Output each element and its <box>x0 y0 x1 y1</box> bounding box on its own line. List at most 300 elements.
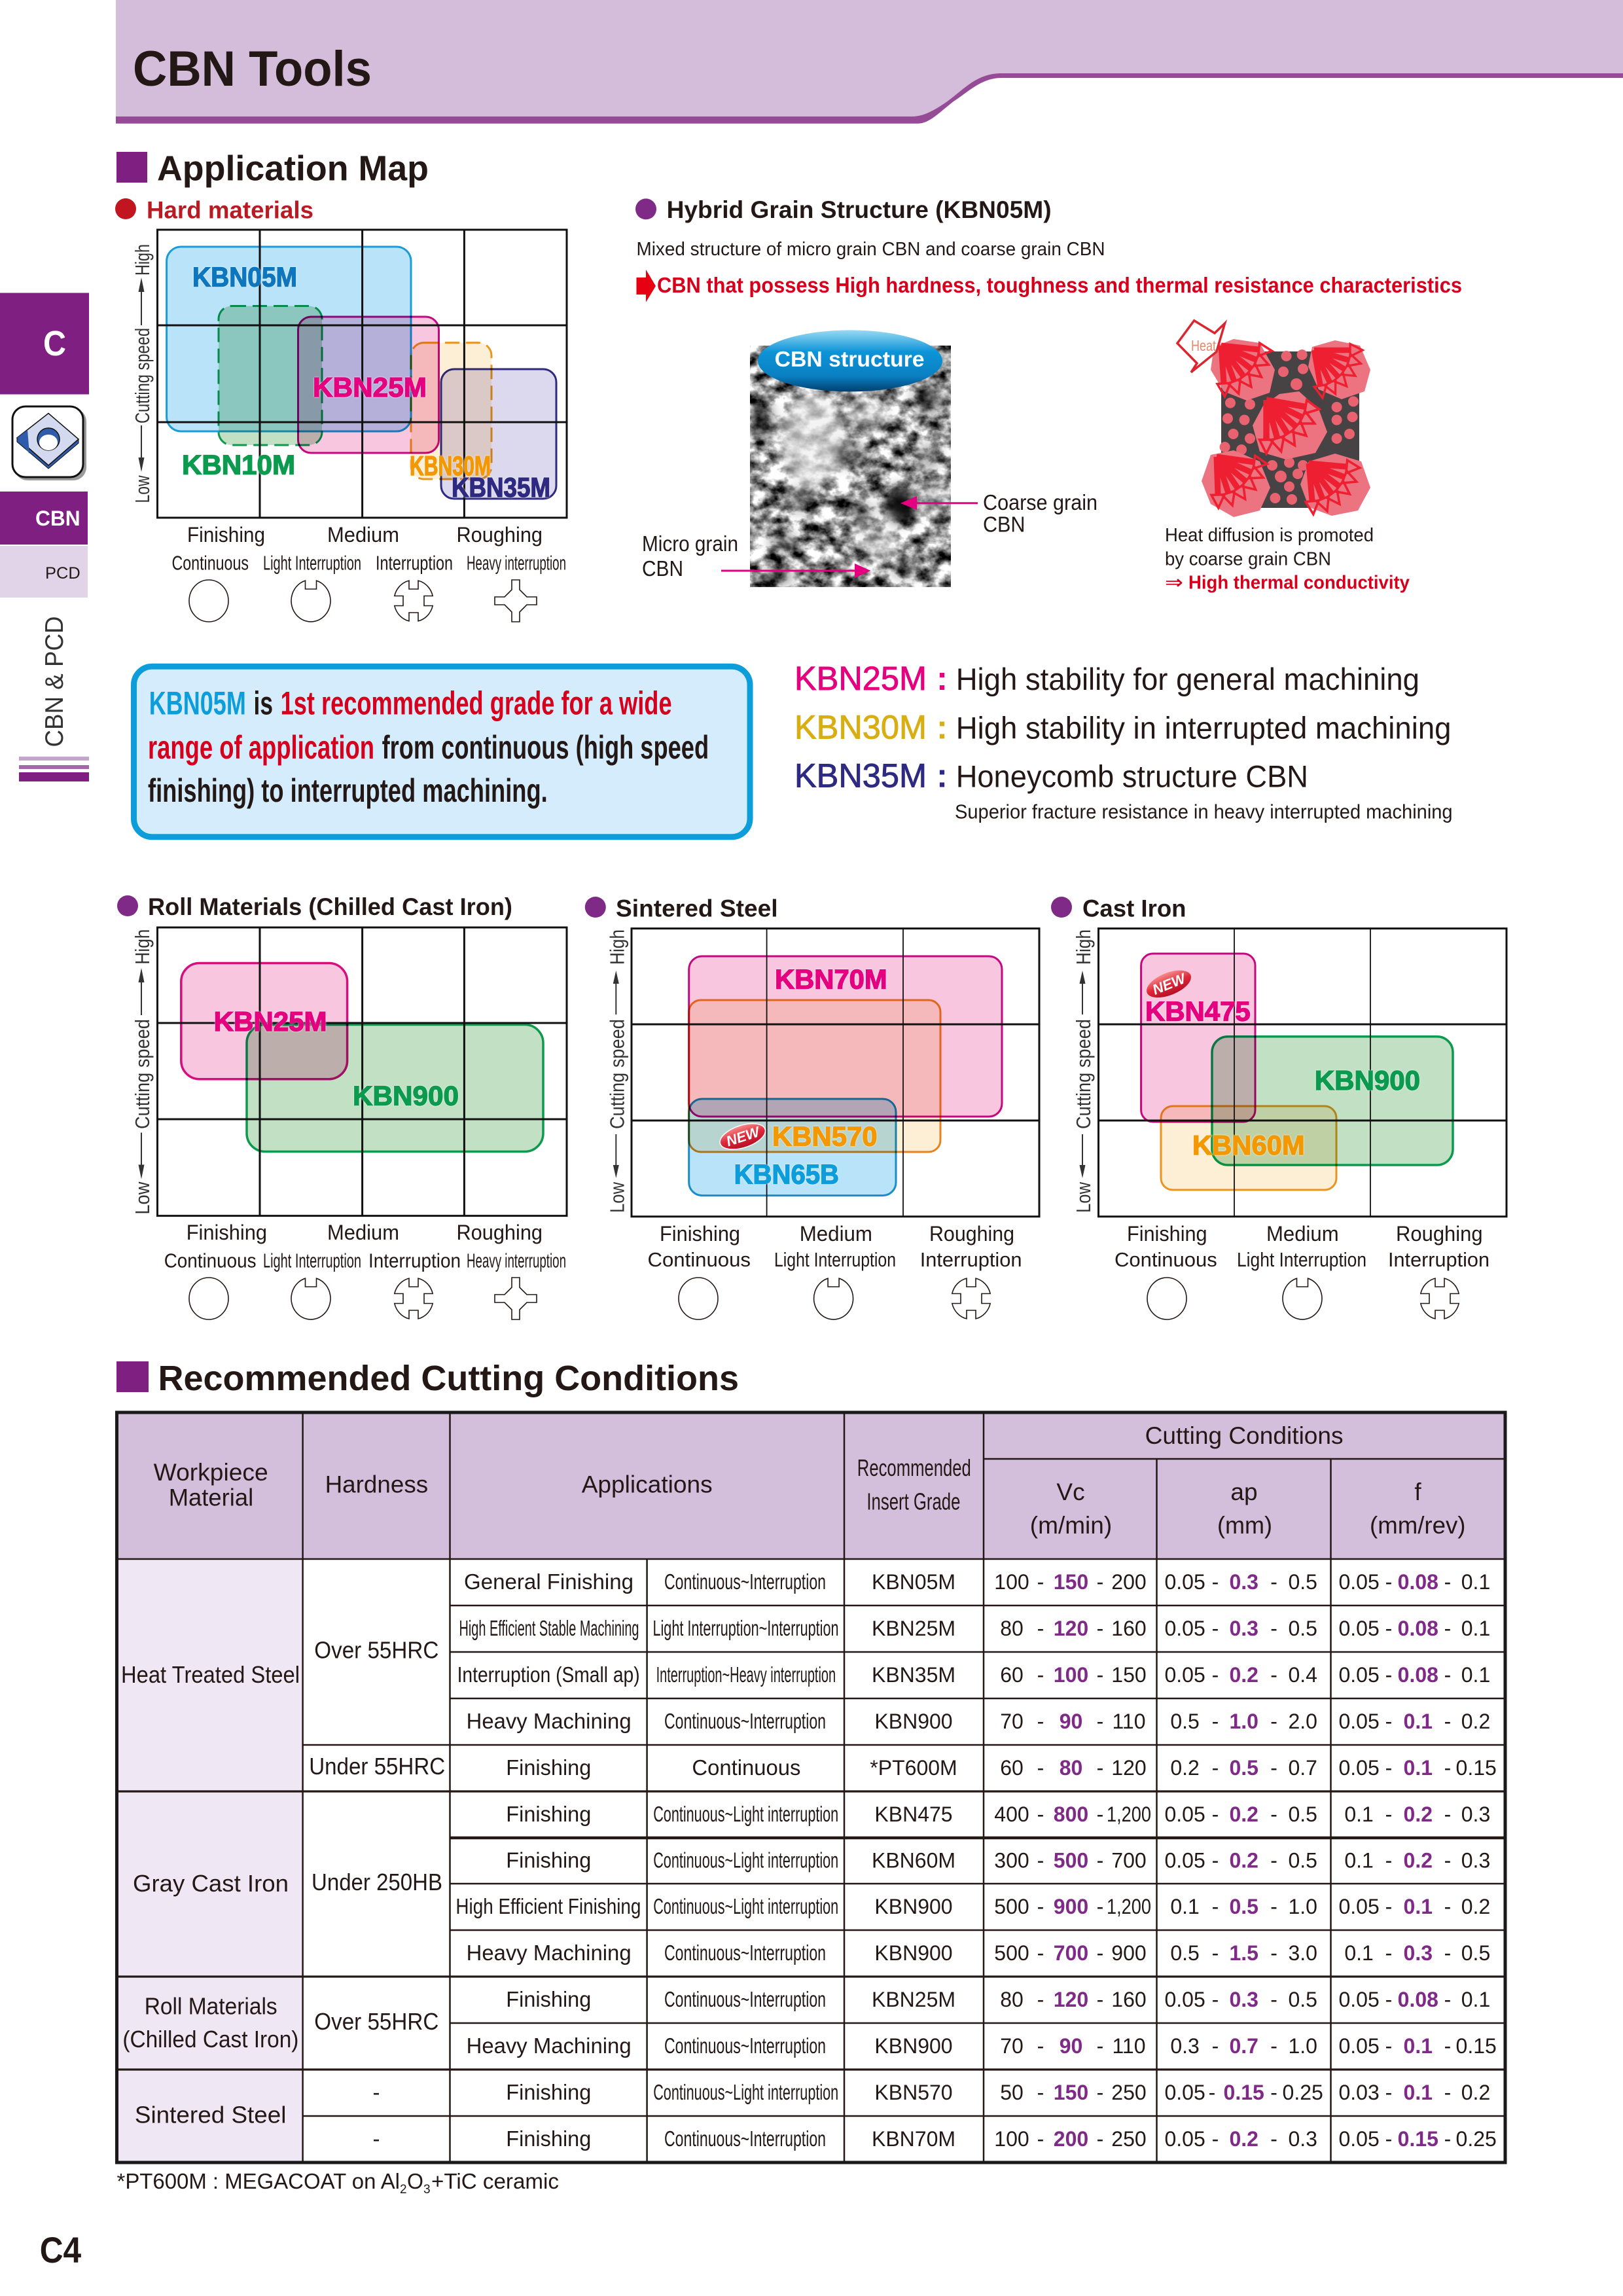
row: KBN35M: - <box>1444 1663 1451 1687</box>
row: KBN35M: - <box>1270 1663 1277 1687</box>
row: KBN900 gray iron heavy machining: Continuous~Interruption <box>664 1941 826 1965</box>
workpiece material and hardness cells <box>121 1637 445 2151</box>
grade legend <box>794 660 1453 823</box>
subheading: Sintered Steel: Sintered Steel <box>616 895 778 922</box>
table header: Insert Grade <box>866 1488 960 1515</box>
label KBN60M: KBN60M <box>1192 1130 1305 1160</box>
row: KBN25M: - <box>1212 1617 1219 1640</box>
region: KBN60M <box>1161 1106 1336 1190</box>
x axis labels: Light Interruption <box>774 1248 896 1271</box>
row: KBN570: 0.25 <box>1283 2081 1323 2104</box>
workpiece material and hardness cells: Gray Cast Iron <box>133 1870 289 1897</box>
legend: KBN25M: KBN25M <box>794 660 927 697</box>
y axis: High <box>131 244 154 276</box>
row: KBN570: 0.1 <box>1404 2081 1433 2104</box>
row: KBN60M: Continuous~Light interruption <box>653 1848 838 1872</box>
row: KBN60M: 0.1 <box>1344 1848 1374 1872</box>
y axis <box>606 929 629 1213</box>
heat caption: by coarse grain CBN <box>1165 549 1331 570</box>
table header: Workpiece <box>154 1459 268 1486</box>
row: PT600M: 80 <box>1060 1756 1082 1780</box>
row: KBN900 gray iron heavy machining <box>467 1941 1490 1965</box>
legend: KBN30M: KBN30M <box>794 709 927 746</box>
icon: heat arrow <box>1177 321 1225 372</box>
icon: CBN insert <box>12 406 86 480</box>
arrow: micro grain <box>721 564 871 578</box>
row: KBN25M roll materials: Finishing <box>506 1987 591 2011</box>
row: KBN35M: 100 <box>1054 1663 1088 1687</box>
workpiece material and hardness cells: Under 55HRC <box>309 1753 445 1780</box>
y axis: Cutting speed <box>1072 1019 1095 1129</box>
row: KBN25M roll materials: - <box>1385 1988 1392 2011</box>
row: KBN70M: 200 <box>1054 2127 1088 2151</box>
label KBN570: KBN570 <box>772 1121 878 1152</box>
heading: Application Map: Application Map <box>157 149 429 188</box>
row: KBN475 <box>506 1802 1490 1826</box>
row: KBN900 heavy machining: Heavy Machining <box>467 1709 632 1733</box>
row: KBN900 roll materials: 0.1 <box>1404 2034 1433 2058</box>
label KBN900: KBN900 <box>353 1081 459 1111</box>
row: KBN25M: - <box>1444 1617 1451 1640</box>
table header: Recommended <box>857 1454 971 1481</box>
row: KBN60M <box>506 1848 1490 1872</box>
row: KBN35M: Interruption (Small ap) <box>457 1662 640 1687</box>
label: micro grain CBN: Micro grain <box>642 531 738 556</box>
region: KBN25M <box>181 963 348 1079</box>
heat caption: High thermal conductivity <box>1188 573 1410 594</box>
row: KBN35M: 0.08 <box>1398 1663 1438 1687</box>
badge: NEW <box>1143 965 1195 1003</box>
callout: KBN05M recommendation: 1st recommended grade for a wide <box>281 685 672 722</box>
x axis labels <box>171 523 566 575</box>
label KBN65B: KBN65B <box>734 1159 839 1190</box>
table header <box>154 1422 1466 1539</box>
row: KBN900 gray iron heavy machining: - <box>1097 1941 1103 1965</box>
row: KBN900 heavy machining: Continuous~Interruption <box>664 1709 826 1733</box>
row: KBN900 heavy machining: 0.2 <box>1461 1710 1490 1733</box>
row: KBN70M: 0.05 <box>1338 2127 1380 2151</box>
row: KBN475: 400 <box>994 1803 1029 1826</box>
diagram: heat diffusion <box>1177 321 1370 519</box>
row: KBN25M: 80 <box>1000 1617 1024 1640</box>
region: KBN65B <box>689 1099 896 1196</box>
row: KBN900 roll materials: 1.0 <box>1288 2034 1317 2058</box>
workpiece material and hardness cells: Over 55HRC <box>314 2008 438 2035</box>
row: KBN25M: 120 <box>1054 1617 1088 1640</box>
x axis labels <box>164 1221 566 1272</box>
row: KBN900 heavy machining: KBN900 <box>874 1710 953 1733</box>
row: KBN900 high efficient finishing <box>455 1894 1490 1918</box>
row: KBN900 high efficient finishing: High Efficient Finishing <box>455 1894 641 1918</box>
row: KBN900 gray iron heavy machining: 0.3 <box>1404 1941 1433 1965</box>
row: KBN70M: Continuous~Interruption <box>664 2126 826 2151</box>
row: KBN25M roll materials: - <box>1037 1988 1044 2011</box>
workpiece icons <box>679 1278 990 1319</box>
label KBN900: KBN900 <box>1315 1065 1420 1096</box>
row: KBN35M: 0.2 <box>1229 1663 1258 1687</box>
row: KBN25M roll materials: - <box>1212 1988 1219 2011</box>
row: KBN05M: 0.5 <box>1288 1570 1317 1594</box>
row: KBN900 gray iron heavy machining: 0.5 <box>1461 1941 1490 1965</box>
page number: C4 <box>40 2229 81 2270</box>
row: KBN570: 0.05 <box>1164 2081 1205 2104</box>
row: KBN60M: 500 <box>1054 1848 1088 1872</box>
region: KBN475 <box>1141 954 1255 1122</box>
chart: Sintered Steel map <box>606 929 1039 1319</box>
panel: hybrid grain structure <box>635 196 1462 594</box>
row: KBN70M: 0.05 <box>1164 2127 1205 2151</box>
row: PT600M: 0.15 <box>1456 1756 1497 1780</box>
y axis <box>131 244 154 503</box>
row: KBN60M: 300 <box>994 1848 1029 1872</box>
heat caption: Heat diffusion is promoted <box>1165 525 1374 546</box>
row: KBN60M: - <box>1212 1848 1219 1872</box>
row: KBN70M: - <box>1444 2127 1451 2151</box>
row: KBN900 roll materials: 0.15 <box>1456 2034 1497 2058</box>
row: KBN900 gray iron heavy machining: 0.1 <box>1344 1941 1374 1965</box>
row: KBN25M <box>459 1616 1490 1640</box>
row: KBN900 heavy machining: 90 <box>1060 1710 1082 1733</box>
row: KBN570: - <box>1385 2081 1392 2104</box>
row: KBN900 high efficient finishing: 0.1 <box>1404 1895 1433 1918</box>
table header: f <box>1414 1479 1421 1505</box>
row: KBN900 high efficient finishing: 1,200 <box>1107 1895 1151 1918</box>
row: KBN475: KBN475 <box>874 1803 953 1826</box>
x axis labels: Heavy interruption <box>467 551 566 575</box>
row: KBN900 roll materials: - <box>1097 2034 1103 2058</box>
row: KBN25M: 160 <box>1111 1617 1147 1640</box>
callout: KBN05M recommendation: range of application <box>148 729 374 766</box>
chapter tab C: C <box>43 324 66 363</box>
row: KBN25M: Light Interruption~Interruption <box>653 1616 839 1640</box>
workpiece material and hardness cells: Roll Materials <box>145 1993 277 2020</box>
row: PT600M: - <box>1037 1756 1044 1780</box>
label KBN25M: KBN25M <box>214 1006 327 1037</box>
row: KBN35M: - <box>1097 1663 1103 1687</box>
row: PT600M: - <box>1212 1756 1219 1780</box>
table header: (mm/rev) <box>1370 1512 1466 1539</box>
row: KBN70M: 0.3 <box>1288 2127 1317 2151</box>
row: KBN900 high efficient finishing: 0.1 <box>1170 1895 1200 1918</box>
row: KBN25M: - <box>1037 1617 1044 1640</box>
callout: KBN05M recommendation: finishing) to interrupted machining. <box>148 772 548 809</box>
footnote: 2 <box>400 2183 407 2197</box>
x axis labels: Medium <box>800 1222 872 1246</box>
chart: Hard materials map <box>131 230 567 622</box>
table header: (m/min) <box>1030 1512 1112 1539</box>
row: KBN475: 800 <box>1054 1803 1088 1826</box>
y axis: Cutting speed <box>131 1019 154 1129</box>
row: KBN475: 1,200 <box>1107 1803 1151 1826</box>
y axis: High <box>131 929 154 965</box>
row: KBN570: 0.03 <box>1338 2081 1380 2104</box>
y axis <box>131 929 154 1215</box>
label KBN30M: KBN30M <box>410 450 491 481</box>
x axis labels: Medium <box>327 523 399 547</box>
row: KBN05M: - <box>1270 1570 1277 1594</box>
row: KBN05M: Continuous~Interruption <box>664 1570 826 1594</box>
row: KBN25M roll materials: 0.1 <box>1461 1988 1490 2011</box>
y axis: Cutting speed <box>606 1019 629 1129</box>
heat caption <box>1165 525 1410 594</box>
label KBN475: KBN475 <box>1145 996 1251 1027</box>
label: coarse grain CBN: Coarse grain <box>983 490 1097 514</box>
row: KBN570: 0.15 <box>1224 2081 1264 2104</box>
description: Mixed structure of micro grain CBN and coarse grain CBN <box>636 239 1105 260</box>
footnote: +TiC ceramic <box>431 2169 559 2193</box>
row: KBN25M roll materials: 0.5 <box>1288 1988 1317 2011</box>
x axis labels: Roughing <box>1396 1222 1483 1246</box>
badge: NEW: NEW <box>1150 969 1189 998</box>
x axis labels: Finishing <box>1127 1222 1207 1246</box>
legend note: Superior fracture resistance in heavy interrupted machining <box>955 800 1453 823</box>
workpiece material and hardness cells: Under 250HB <box>312 1869 442 1895</box>
x axis labels: Interruption <box>920 1248 1022 1271</box>
legend: KBN35M: KBN35M <box>794 757 927 795</box>
row: KBN60M: 0.05 <box>1164 1848 1205 1872</box>
row: KBN900 heavy machining: 1.0 <box>1229 1710 1258 1733</box>
row: KBN475: Continuous~Light interruption <box>653 1802 838 1826</box>
tab PCD: PCD <box>45 564 80 583</box>
row: KBN35M: 0.4 <box>1288 1663 1317 1687</box>
vertical chapter label: CBN & PCD <box>41 617 69 747</box>
table header: (mm) <box>1217 1512 1272 1539</box>
row: KBN900 roll materials: - <box>1385 2034 1392 2058</box>
row: PT600M: 0.5 <box>1229 1756 1258 1780</box>
row: KBN900 roll materials: 90 <box>1060 2034 1082 2058</box>
row: KBN05M: 200 <box>1111 1570 1147 1594</box>
row: KBN900 heavy machining: 110 <box>1112 1710 1146 1733</box>
row: KBN900 roll materials: KBN900 <box>874 2034 953 2058</box>
row: KBN475: 0.05 <box>1164 1803 1205 1826</box>
icon: red arrow <box>636 270 656 302</box>
row: KBN05M: - <box>1037 1570 1044 1594</box>
row: KBN25M: 0.08 <box>1398 1617 1438 1640</box>
y axis: Low <box>131 1181 154 1215</box>
row: KBN475: 0.5 <box>1288 1803 1317 1826</box>
x axis labels: Heavy interruption <box>467 1249 566 1272</box>
row: KBN570: 0.2 <box>1461 2081 1490 2104</box>
row: KBN900 gray iron heavy machining: Heavy Machining <box>467 1941 632 1965</box>
row: KBN70M <box>506 2126 1497 2151</box>
table header: Hardness <box>325 1471 428 1498</box>
row: KBN25M: 0.5 <box>1288 1617 1317 1640</box>
row: KBN900 gray iron heavy machining: 0.5 <box>1170 1941 1200 1965</box>
row: KBN35M: - <box>1037 1663 1044 1687</box>
row: KBN60M: 0.5 <box>1288 1848 1317 1872</box>
row: PT600M: - <box>1385 1756 1392 1780</box>
row: KBN35M: 0.1 <box>1461 1663 1490 1687</box>
row: KBN900 heavy machining: - <box>1270 1710 1277 1733</box>
row: KBN900 gray iron heavy machining: 3.0 <box>1288 1941 1317 1965</box>
row: KBN25M: - <box>1385 1617 1392 1640</box>
row: KBN900 high efficient finishing: - <box>1444 1895 1451 1918</box>
legend: KBN35M: Honeycomb structure CBN <box>956 759 1308 794</box>
row: KBN570: - <box>1037 2081 1044 2104</box>
row: KBN70M: Finishing <box>506 2126 591 2151</box>
row: KBN900 heavy machining: 0.05 <box>1338 1710 1380 1733</box>
sidebar <box>0 293 89 781</box>
row: KBN70M: - <box>1097 2127 1103 2151</box>
legend: KBN30M <box>794 709 1452 746</box>
row: KBN60M: 0.2 <box>1229 1848 1258 1872</box>
row: KBN900 roll materials: 0.3 <box>1170 2034 1200 2058</box>
row: KBN05M: - <box>1212 1570 1219 1594</box>
row: KBN35M: KBN35M <box>872 1663 955 1687</box>
row: PT600M: Continuous <box>692 1755 800 1780</box>
row: KBN35M: Interruption~Heavy interruption <box>656 1662 836 1687</box>
row: KBN475: 0.2 <box>1229 1803 1258 1826</box>
arrow: coarse grain <box>901 496 978 510</box>
table header: Applications <box>582 1471 713 1498</box>
tab PCD <box>0 546 88 598</box>
row: KBN900 heavy machining: 70 <box>1000 1710 1024 1733</box>
row: KBN900 high efficient finishing: - <box>1097 1895 1103 1918</box>
row: KBN60M: 700 <box>1111 1848 1147 1872</box>
row: KBN70M: - <box>1037 2127 1044 2151</box>
label: micro grain CBN: CBN <box>642 556 683 581</box>
y axis: Low <box>131 475 154 503</box>
row: KBN05M: 100 <box>994 1570 1029 1594</box>
row: KBN900 high efficient finishing: KBN900 <box>874 1895 953 1918</box>
row: KBN900 gray iron heavy machining: 700 <box>1054 1941 1088 1965</box>
row: KBN475: - <box>1212 1803 1219 1826</box>
row: KBN570: - <box>1444 2081 1451 2104</box>
label: micro grain CBN <box>642 531 738 581</box>
row: KBN570: Continuous~Light interruption <box>653 2080 838 2104</box>
row: KBN35M: - <box>1385 1663 1392 1687</box>
row: KBN900 heavy machining: 0.1 <box>1404 1710 1433 1733</box>
row: KBN05M: 150 <box>1054 1570 1088 1594</box>
x axis labels: Medium <box>327 1221 399 1244</box>
footnote <box>116 2169 559 2197</box>
label KBN10M: KBN10M <box>182 449 295 480</box>
label KBN25M: KBN25M <box>313 372 427 403</box>
row: KBN25M roll materials: 160 <box>1111 1988 1147 2011</box>
row: KBN05M: - <box>1385 1570 1392 1594</box>
row: PT600M: - <box>1444 1756 1451 1780</box>
row: KBN05M: 0.05 <box>1338 1570 1380 1594</box>
row: KBN900 gray iron heavy machining: 500 <box>994 1941 1029 1965</box>
x axis labels: Finishing <box>660 1222 740 1246</box>
row: KBN900 gray iron heavy machining: - <box>1037 1941 1044 1965</box>
row: KBN60M: - <box>1444 1848 1451 1872</box>
x axis labels: Continuous <box>648 1248 751 1271</box>
row: KBN25M: High Efficient Stable Machining <box>459 1616 639 1640</box>
region: KBN35M <box>441 369 556 499</box>
row: KBN900 high efficient finishing: 500 <box>994 1895 1029 1918</box>
subheading: Roll Materials: Roll Materials (Chilled Cast Iron) <box>148 893 512 920</box>
chart: Roll Materials map <box>131 927 567 1319</box>
workpiece icons <box>1147 1278 1459 1319</box>
label: coarse grain CBN <box>983 490 1097 537</box>
heading: Recommended Cutting Conditions: Recommended Cutting Conditions <box>158 1359 739 1398</box>
row: KBN475: 0.2 <box>1404 1803 1433 1826</box>
y axis: Low <box>606 1181 629 1213</box>
row: KBN25M roll materials: 0.3 <box>1229 1988 1258 2011</box>
row: KBN05M <box>464 1570 1490 1594</box>
row: KBN900 roll materials: - <box>1037 2034 1044 2058</box>
footnote: *PT600M : MEGACOAT on Al <box>116 2169 400 2193</box>
label KBN70M: KBN70M <box>775 963 887 995</box>
row: PT600M: Finishing <box>506 1755 591 1780</box>
row: KBN900 roll materials: - <box>1212 2034 1219 2058</box>
photo: CBN structure <box>750 346 951 587</box>
label: coarse grain CBN: CBN <box>983 512 1025 537</box>
row: KBN570: - <box>1209 2081 1215 2104</box>
row: KBN35M: - <box>1212 1663 1219 1687</box>
row: KBN25M roll materials: Continuous~Interruption <box>664 1987 826 2011</box>
row: KBN900 heavy machining: - <box>1212 1710 1219 1733</box>
row: PT600M: - <box>1270 1756 1277 1780</box>
x axis labels: Interruption <box>368 1249 461 1272</box>
row: KBN900 high efficient finishing: 0.2 <box>1461 1895 1490 1918</box>
row: PT600M: 0.05 <box>1338 1756 1380 1780</box>
region: KBN30M <box>411 343 491 479</box>
callout: KBN05M recommendation: KBN05M <box>149 685 246 722</box>
row: KBN25M roll materials: 0.05 <box>1338 1988 1380 2011</box>
x axis labels: Light Interruption <box>263 1249 361 1272</box>
row: KBN70M: - <box>1212 2127 1219 2151</box>
y axis: Cutting speed <box>131 328 154 423</box>
x axis labels: Interruption <box>1388 1248 1489 1271</box>
row: KBN570: 250 <box>1111 2081 1147 2104</box>
icon: heat arrow: Heat <box>1191 337 1216 354</box>
row: KBN475: - <box>1097 1803 1103 1826</box>
row: KBN25M roll materials: KBN25M <box>872 1988 955 2011</box>
row: KBN900 roll materials: - <box>1270 2034 1277 2058</box>
row: KBN900 gray iron heavy machining: KBN900 <box>874 1941 953 1965</box>
row: KBN25M: KBN25M <box>872 1617 955 1640</box>
row: KBN05M: - <box>1444 1570 1451 1594</box>
tab CBN <box>0 492 88 545</box>
row: KBN70M: 250 <box>1111 2127 1147 2151</box>
row: KBN35M <box>457 1662 1490 1687</box>
x axis labels: Medium <box>1266 1222 1339 1246</box>
legend: KBN30M: : <box>936 709 948 746</box>
row: KBN900 gray iron heavy machining: 900 <box>1111 1941 1147 1965</box>
x axis labels: Roughing <box>457 523 543 547</box>
row: KBN475: - <box>1385 1803 1392 1826</box>
table header: Material <box>169 1484 253 1511</box>
table: recommended cutting conditions <box>116 1412 1505 2162</box>
badge: CBN structure: CBN structure <box>775 347 925 371</box>
row: PT600M: 60 <box>1000 1756 1024 1780</box>
workpiece material and hardness cells: - <box>373 2080 380 2104</box>
row: KBN570: - <box>1270 2081 1277 2104</box>
key statement: CBN that possess High hardness, toughness and thermal resistance characteristics <box>657 273 1462 297</box>
row: PT600M <box>506 1755 1497 1780</box>
row: KBN70M: 0.25 <box>1456 2127 1497 2151</box>
row: KBN900 high efficient finishing: - <box>1385 1895 1392 1918</box>
row: KBN25M roll materials: - <box>1444 1988 1451 2011</box>
legend: KBN25M: High stability for general machining <box>956 662 1419 696</box>
legend: KBN25M: : <box>936 660 948 697</box>
row: KBN475: Finishing <box>506 1802 591 1826</box>
row: KBN900 high efficient finishing: 0.5 <box>1229 1895 1258 1918</box>
row: KBN05M: 0.1 <box>1461 1570 1490 1594</box>
row: KBN70M: 100 <box>994 2127 1029 2151</box>
workpiece material and hardness cells: Heat Treated Steel <box>121 1661 300 1688</box>
region: KBN25M <box>298 317 438 453</box>
row: KBN60M: Finishing <box>506 1848 591 1872</box>
row: KBN900 roll materials: 110 <box>1112 2034 1146 2058</box>
table header: ap <box>1230 1479 1258 1505</box>
row: KBN60M: - <box>1270 1848 1277 1872</box>
row: KBN70M: 0.15 <box>1398 2127 1438 2151</box>
row: KBN05M: 0.08 <box>1398 1570 1438 1594</box>
row: KBN900 high efficient finishing: - <box>1270 1895 1277 1918</box>
